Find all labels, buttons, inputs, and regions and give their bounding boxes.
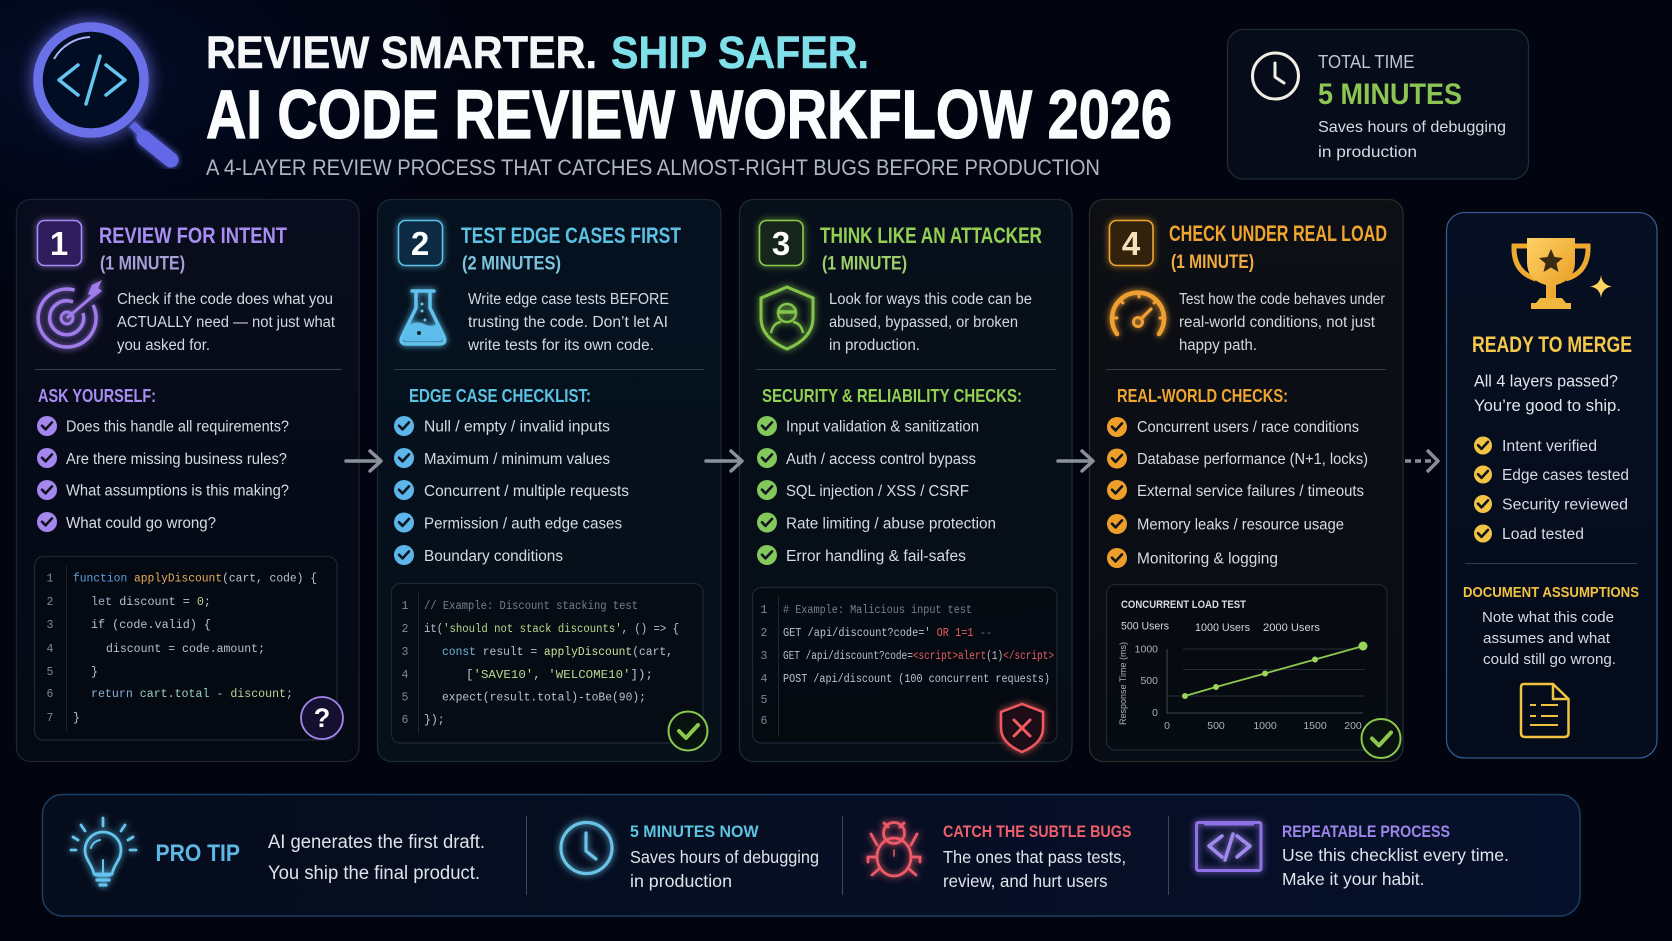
code block: POST /api/discount (100 concurrent requests) xyxy=(783,673,1050,686)
code block: 2 xyxy=(47,596,54,609)
icon: bug xyxy=(868,822,920,876)
step number badge 1: 1 xyxy=(50,225,68,262)
checklist: External service failures / timeouts xyxy=(1137,483,1364,500)
text: pro tip xyxy=(268,832,485,884)
code block: return cart.total - discount; xyxy=(91,688,293,701)
subheading: real-world checks: REAL-WORLD CHECKS: xyxy=(1117,386,1288,406)
description: Test how the code behaves under xyxy=(1179,291,1385,308)
icon: document xyxy=(1521,684,1568,737)
checklist: Does this handle all requirements? xyxy=(66,418,289,436)
text: all layers passed: All 4 layers passed? xyxy=(1474,372,1618,390)
panel: step 2 test edge cases xyxy=(378,200,721,762)
checklist: Null / empty / invalid inputs xyxy=(424,418,610,436)
heading: CHECK UNDER REAL LOAD xyxy=(1169,221,1387,246)
checklist: Edge cases tested xyxy=(1502,467,1629,484)
description: happy path. xyxy=(1179,337,1257,354)
code block: 5 xyxy=(47,666,54,679)
chart: concurrent load test: 500 xyxy=(1207,720,1225,732)
code block: }); xyxy=(424,714,445,727)
heading: (1 MINUTE) xyxy=(100,254,185,274)
note: saves hours: in production xyxy=(1318,144,1417,161)
icon: gauge xyxy=(1112,293,1165,334)
code block: 5 xyxy=(761,694,768,707)
code block: 2 xyxy=(402,623,409,636)
title line: review smarter ship safer: SHIP SAFER. xyxy=(611,27,869,78)
item: 5 minutes now: 5 MINUTES NOW xyxy=(630,822,759,841)
panel: step 4 check under real load xyxy=(1090,200,1403,762)
text: all layers passed: You’re good to ship. xyxy=(1474,397,1621,415)
description: real-world conditions, not just xyxy=(1179,314,1376,331)
icon: question badge xyxy=(301,697,343,739)
panel: ready to merge xyxy=(1446,212,1657,758)
chart: concurrent load test: 0 xyxy=(1152,707,1158,719)
checklist xyxy=(1474,436,1629,543)
checklist: Concurrent / multiple requests xyxy=(424,483,629,500)
description xyxy=(1179,291,1385,354)
chart: concurrent load test: 200 xyxy=(1344,720,1362,732)
chart: concurrent load test: 1000 xyxy=(1253,720,1277,732)
item: 5 minutes now: Saves hours of debugging xyxy=(630,847,819,867)
checklist: Rate limiting / abuse protection xyxy=(786,516,996,532)
description: Write edge case tests BEFORE xyxy=(468,291,669,308)
code block: 3 xyxy=(761,650,768,663)
checklist xyxy=(37,416,289,532)
title block xyxy=(206,27,1172,180)
step number badge 3 xyxy=(760,220,803,266)
item: 5 minutes now xyxy=(630,822,819,891)
item: 5 minutes now: in production xyxy=(630,871,732,891)
item: catch the subtle bugs: The ones that pass tests, xyxy=(943,847,1126,867)
code block: 6 xyxy=(761,715,768,728)
heading: THINK LIKE AN ATTACKER xyxy=(820,223,1042,248)
description: ACTUALLY need — not just what xyxy=(117,314,336,331)
heading: pro tip: PRO TIP xyxy=(156,840,240,867)
subtitle: A 4-LAYER REVIEW PROCESS THAT CATCHES ALMOST-RIGHT BUGS BEFORE PRODUCTION xyxy=(206,155,1100,180)
subheading: document assumptions: DOCUMENT ASSUMPTIONS xyxy=(1463,585,1639,601)
checklist: Are there missing business rules? xyxy=(66,451,287,468)
item: repeatable process: Make it your habit. xyxy=(1282,869,1424,889)
arrow: step 3 to step 4 xyxy=(1058,451,1093,471)
chart: concurrent load test: 1000 Users xyxy=(1195,622,1250,634)
checklist: Intent verified xyxy=(1502,438,1597,455)
text: pro tip: You ship the final product. xyxy=(268,863,480,884)
chart: concurrent load test: 0 xyxy=(1164,720,1170,732)
checklist: Error handling & fail-safes xyxy=(786,548,966,565)
icon: green check badge xyxy=(1362,719,1400,758)
step number badge 2: 2 xyxy=(411,225,429,262)
heading: (2 MINUTES) xyxy=(462,254,561,274)
code block: 1 xyxy=(47,572,54,586)
code block: 4 xyxy=(47,643,54,656)
chart: concurrent load test: 2000 Users xyxy=(1263,622,1320,634)
step number badge 2 xyxy=(398,220,442,266)
description: abused, bypassed, or broken xyxy=(829,314,1018,331)
panel: step 1 review for intent xyxy=(16,200,359,762)
title line: review smarter ship safer xyxy=(206,27,869,78)
text: note: could still go wrong. xyxy=(1483,651,1616,668)
code block: } xyxy=(73,712,80,725)
code block: function applyDiscount(cart, code) { xyxy=(73,572,317,586)
code block: 1 xyxy=(402,600,409,613)
checklist: Input validation & sanitization xyxy=(786,418,979,436)
description: Look for ways this code can be xyxy=(829,291,1032,308)
value: 5 minutes: 5 MINUTES xyxy=(1318,78,1462,111)
chart: concurrent load test: 500 Users xyxy=(1121,620,1169,632)
main title: AI CODE REVIEW WORKFLOW 2026 xyxy=(206,76,1172,153)
heading: REVIEW FOR INTENT xyxy=(99,223,287,248)
code block: // Example: Discount stacking test xyxy=(424,600,638,613)
code block: 4 xyxy=(402,669,409,682)
description: write tests for its own code. xyxy=(467,337,654,354)
code block: let discount = 0; xyxy=(91,596,211,609)
item: catch the subtle bugs: CATCH THE SUBTLE BUGS xyxy=(943,822,1132,841)
code block: 6 xyxy=(47,688,54,701)
text: all layers passed xyxy=(1474,372,1621,415)
checklist: Auth / access control bypass xyxy=(786,451,976,468)
icon: target with arrow xyxy=(38,280,102,347)
code block: 7 xyxy=(47,712,53,725)
code block: GET /api/discount?code=<script>alert(1)</script> xyxy=(783,650,1054,663)
item: catch the subtle bugs xyxy=(943,822,1132,891)
arrow: step 1 to step 2 xyxy=(346,451,381,471)
icon: code window xyxy=(1196,822,1261,870)
chart: concurrent load test: 1000 xyxy=(1135,644,1158,656)
checklist: Concurrent users / race conditions xyxy=(1137,419,1359,436)
code block: 3 xyxy=(47,619,54,632)
icon: trophy xyxy=(1514,238,1588,309)
code block xyxy=(752,588,1057,743)
icon: shield with hacker xyxy=(761,287,813,349)
heading: TEST EDGE CASES FIRST xyxy=(461,223,681,248)
checklist: What assumptions is this making? xyxy=(66,482,289,500)
icon: green check badge xyxy=(668,712,708,750)
code block: ['SAVE10' , 'WELCOME10' ]); xyxy=(466,669,653,682)
chart: concurrent load test xyxy=(1106,584,1387,750)
icon: flask xyxy=(401,291,445,344)
checklist xyxy=(757,416,996,565)
text: pro tip: AI generates the first draft. xyxy=(268,832,485,853)
chart: concurrent load test: 1500 xyxy=(1303,720,1327,732)
description: in production. xyxy=(829,337,920,354)
subheading: ask yourself: ASK YOURSELF: xyxy=(38,386,156,406)
heading xyxy=(461,223,681,274)
icon: clock xyxy=(1252,53,1298,99)
label: total time: TOTAL TIME xyxy=(1318,52,1414,72)
code block: 4 xyxy=(761,673,768,686)
heading: ready to merge: READY TO MERGE xyxy=(1472,332,1632,357)
checklist: Permission / auth edge cases xyxy=(424,516,622,532)
code block: 2 xyxy=(761,627,768,640)
chart: concurrent load test: 500 xyxy=(1140,675,1158,687)
item: catch the subtle bugs: review, and hurt users xyxy=(943,871,1108,891)
text: note: Note what this code xyxy=(1482,609,1614,626)
heading xyxy=(1169,221,1387,273)
checklist: Security reviewed xyxy=(1502,496,1628,514)
checklist: Boundary conditions xyxy=(424,548,563,565)
description xyxy=(829,291,1032,354)
code block: } xyxy=(91,666,98,679)
panel: step 3 think like an attacker xyxy=(740,200,1072,762)
code block: expect(result.total)-toBe(90); xyxy=(442,692,646,704)
note: saves hours xyxy=(1318,119,1506,161)
description xyxy=(467,291,669,354)
subheading: security checks: SECURITY & RELIABILITY CHECKS: xyxy=(762,386,1022,406)
description: Check if the code does what you xyxy=(117,291,333,308)
chart: concurrent load test: CONCURRENT LOAD TEST xyxy=(1121,599,1246,611)
panel: pro tip bar xyxy=(42,794,1580,916)
step number badge 3: 3 xyxy=(772,225,790,262)
code block: const result = applyDiscount(cart, xyxy=(442,646,673,659)
icon: clock xyxy=(561,822,612,874)
arrow: step 2 to step 3 xyxy=(706,451,742,471)
item: repeatable process: Use this checklist every time. xyxy=(1282,845,1509,865)
checklist: Monitoring & logging xyxy=(1137,550,1278,568)
code block xyxy=(34,556,337,740)
icon: magnifying glass with code xyxy=(38,27,171,160)
code block: 1 xyxy=(761,604,768,617)
note: saves hours: Saves hours of debugging xyxy=(1318,119,1506,136)
checklist: What could go wrong? xyxy=(66,515,216,532)
heading xyxy=(820,223,1042,274)
step number badge 4: 4 xyxy=(1122,225,1141,262)
subheading: edge case checklist: EDGE CASE CHECKLIST: xyxy=(409,386,591,406)
checklist: Maximum / minimum values xyxy=(424,451,610,468)
icon: red shield with x xyxy=(1001,704,1043,752)
text: note: assumes and what xyxy=(1483,630,1611,647)
code block: it('should not stack discounts', () => { xyxy=(424,623,679,636)
text: note xyxy=(1482,609,1616,668)
checklist: SQL injection / XSS / CSRF xyxy=(786,483,969,500)
icon: question badge: ? xyxy=(314,703,330,733)
code block: 5 xyxy=(402,692,409,704)
arrow: dashed to ready to merge xyxy=(1405,450,1438,472)
heading xyxy=(99,223,287,274)
checklist: Load tested xyxy=(1502,526,1584,543)
checklist: Database performance (N+1, locks) xyxy=(1137,451,1368,468)
code block: GET /api/discount?code=' OR 1=1 -- xyxy=(783,627,992,640)
description: you asked for. xyxy=(117,337,210,354)
step number badge 4 xyxy=(1110,220,1153,266)
code block: 6 xyxy=(402,714,409,727)
code block: discount = code.amount; xyxy=(106,643,265,656)
icon: light bulb xyxy=(71,818,136,885)
checklist xyxy=(1107,417,1368,568)
item: repeatable process xyxy=(1282,822,1509,889)
checklist: Memory leaks / resource usage xyxy=(1137,516,1344,534)
code block: # Example: Malicious input test xyxy=(783,604,972,617)
checklist xyxy=(394,416,629,565)
step number badge 1 xyxy=(38,220,82,266)
icon: sparkle xyxy=(1590,275,1612,298)
title line: review smarter ship safer: REVIEW SMARTER. xyxy=(206,27,597,78)
code block xyxy=(392,584,703,743)
description xyxy=(117,291,336,354)
code block: 3 xyxy=(402,646,409,659)
heading: (1 MINUTE) xyxy=(822,254,907,274)
chart: concurrent load test: Response Time (ms) xyxy=(1118,642,1129,725)
code block: if (code.valid) { xyxy=(91,619,211,632)
panel: total time xyxy=(1228,30,1528,179)
item: repeatable process: REPEATABLE PROCESS xyxy=(1282,822,1450,841)
heading: (1 MINUTE) xyxy=(1171,252,1254,273)
description: trusting the code. Don’t let AI xyxy=(468,314,668,331)
